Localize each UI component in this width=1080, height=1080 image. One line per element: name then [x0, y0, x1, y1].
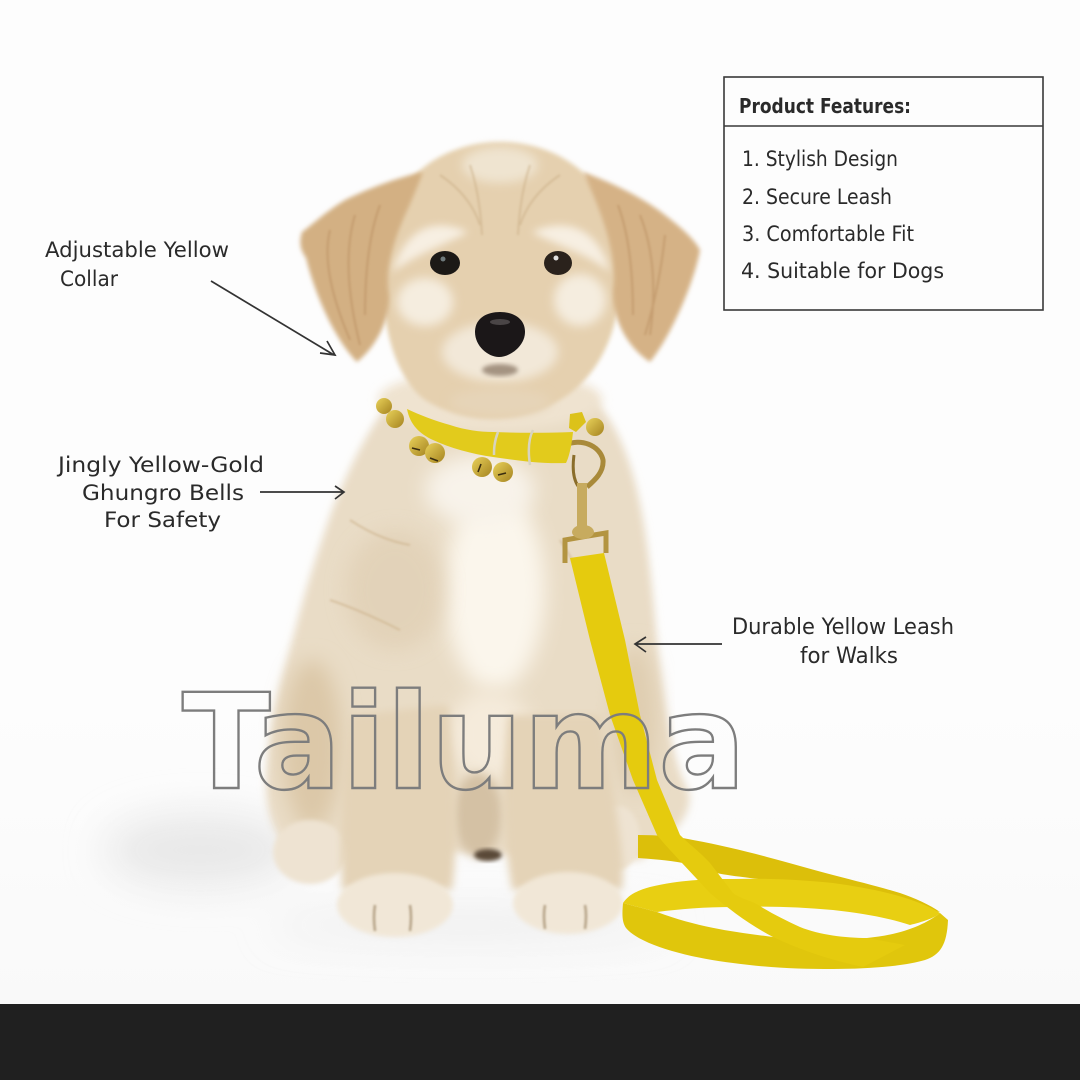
- nose and mouth: [475, 312, 525, 376]
- watermark: Tailuma: [182, 666, 746, 820]
- callout: durable yellow leash: [635, 615, 954, 669]
- left ear: [300, 172, 423, 362]
- feature list: 1. Stylish Design: [742, 147, 898, 171]
- leash clip: [565, 442, 606, 563]
- lower band: [622, 903, 948, 969]
- footer bar: [0, 1004, 1080, 1080]
- callout: adjustable yellow collar: Adjustable Yellow: [45, 238, 229, 262]
- right ear: [583, 172, 700, 362]
- callout: durable yellow leash: for Walks: [800, 644, 898, 669]
- front legs: [337, 705, 623, 937]
- callout: durable yellow leash: Durable Yellow Leash: [732, 615, 954, 640]
- puppy body: [266, 395, 689, 860]
- feature list: 2. Secure Leash: [742, 185, 892, 209]
- floor shadow: [105, 814, 670, 937]
- fur strokes: [328, 165, 665, 630]
- panel: product features: [724, 77, 1043, 310]
- callout: ghungro bells: Ghungro Bells: [82, 481, 244, 506]
- puppy illustration: [266, 142, 700, 937]
- collar: [376, 398, 604, 482]
- neck ruff: [378, 370, 602, 430]
- callout: adjustable yellow collar: Collar: [60, 267, 118, 291]
- callout: adjustable yellow collar: [45, 238, 335, 355]
- feature list: [741, 147, 944, 283]
- main strap: [570, 553, 905, 967]
- leash: [570, 553, 948, 969]
- head: [383, 142, 621, 419]
- middle band: [623, 879, 940, 925]
- upper band: [638, 835, 940, 912]
- feature list: 4. Suitable for Dogs: [741, 259, 944, 283]
- callout: ghungro bells: [56, 453, 344, 533]
- panel heading: Product Features:: [739, 94, 911, 118]
- callout: ghungro bells: For Safety: [104, 508, 221, 533]
- collar bells: [376, 398, 604, 482]
- callout: ghungro bells: Jingly Yellow-Gold: [56, 453, 264, 478]
- feature list: 3. Comfortable Fit: [742, 222, 914, 246]
- hind paws: [273, 806, 640, 884]
- eyes: [430, 251, 572, 275]
